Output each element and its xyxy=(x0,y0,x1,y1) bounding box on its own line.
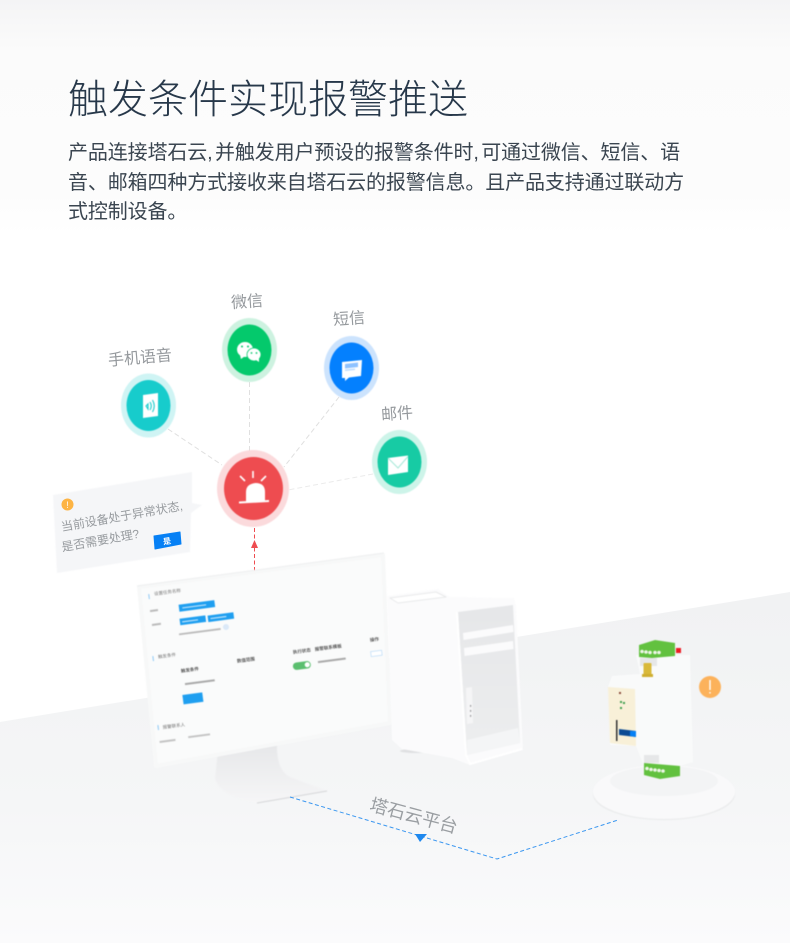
icon: wechat xyxy=(222,318,277,382)
icon: warning xyxy=(62,498,74,510)
screen: table headers: 触发条件 xyxy=(180,665,200,675)
callout text: 当前设备处于异常状态, xyxy=(60,498,184,534)
screen: section heading: 设置任务名称 xyxy=(154,587,182,597)
screen: table headers: 数值范围 xyxy=(236,655,256,665)
button: yes: 是 xyxy=(162,536,172,547)
title: 触发条件实现报警推送 xyxy=(68,78,468,122)
screen: condition heading: 触发条件 xyxy=(158,651,177,660)
intro text block: 音、邮箱四种方式接收来自塔石云的报警信息。且产品支持通过联动方 xyxy=(68,172,684,194)
device: bottom terminal xyxy=(644,755,680,779)
intro text block xyxy=(68,142,684,223)
button: yes xyxy=(154,532,181,549)
pedestal xyxy=(593,765,735,820)
screen: table headers: 报警联系模板 xyxy=(314,642,343,653)
icon: alarm xyxy=(217,450,289,527)
screen: row xyxy=(318,657,346,663)
screen: toggle xyxy=(292,661,311,670)
screen: add button xyxy=(182,692,203,704)
screen: contacts heading: 报警联系人 xyxy=(162,721,186,731)
icon: phone voice xyxy=(121,374,176,438)
device: front label xyxy=(608,687,636,746)
label: sms: 短信 xyxy=(332,309,366,329)
callout: device alert xyxy=(53,472,202,573)
label: platform: 塔石云平台 xyxy=(368,795,460,837)
floor surface xyxy=(0,592,790,943)
connector lines xyxy=(168,382,373,490)
server tower xyxy=(387,589,523,765)
icon: device warning xyxy=(699,676,721,698)
device: antenna connector xyxy=(640,658,657,677)
screen: section heading xyxy=(148,587,182,599)
icon: email xyxy=(372,430,427,494)
monitor: alarm settings screen xyxy=(137,553,390,766)
callout text: 是否需要处理? xyxy=(60,527,141,554)
screen: edit button xyxy=(371,650,382,657)
platform link xyxy=(290,797,618,859)
screen: tags xyxy=(150,598,235,640)
icon: sms xyxy=(324,336,379,400)
screen: contacts heading xyxy=(157,721,186,732)
screen: table headers xyxy=(180,635,381,675)
screen: table headers: 操作 xyxy=(369,635,380,644)
label: phone voice: 手机语音 xyxy=(107,346,173,370)
device: din-rail controller xyxy=(608,640,693,779)
intro text block: 产品连接塔石云, 并触发用户预设的报警条件时, 可通过微信、短信、语 xyxy=(68,142,680,164)
monitor stand xyxy=(215,742,327,803)
icon: warning: ! xyxy=(66,500,69,510)
label: email: 邮件 xyxy=(380,404,414,424)
screen: table headers: 执行状态 xyxy=(292,646,312,656)
label: wechat: 微信 xyxy=(230,292,264,312)
screen: condition heading xyxy=(152,651,177,661)
alert arrow xyxy=(251,528,258,572)
device: top terminal xyxy=(639,640,681,658)
intro text block: 式控制设备。 xyxy=(68,201,187,223)
